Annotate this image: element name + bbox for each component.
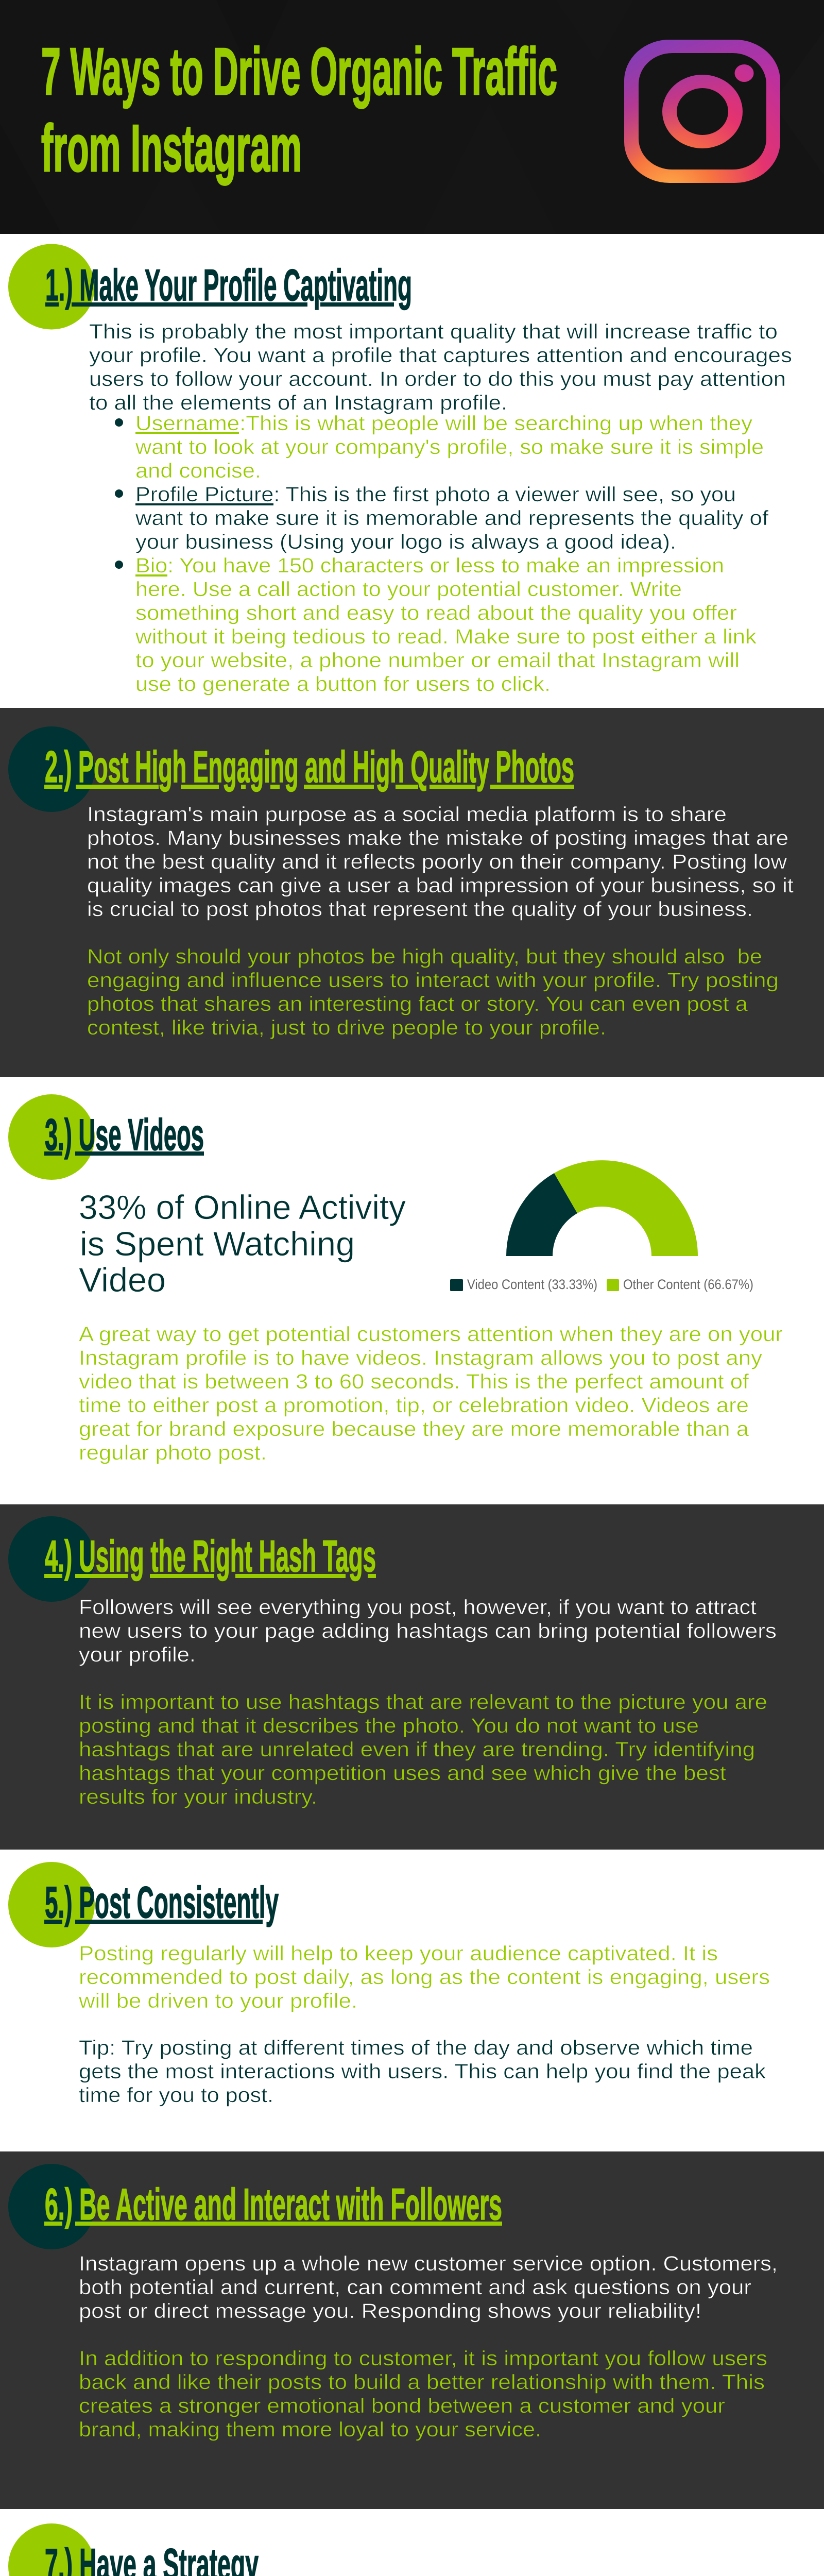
badge circle 1 (8, 244, 95, 330)
green paragraph: regular photo post. (79, 1442, 267, 1464)
bullet: profile picture: want to make sure it is memorable and represents the quality of (135, 507, 769, 530)
chart legend: Video Content (33.33%) (467, 1277, 597, 1292)
white paragraph: Instagram's main purpose as a social media platform is to share (87, 803, 727, 826)
badge circle 4 (8, 1516, 95, 1602)
tip paragraph (79, 2037, 766, 2107)
white paragraph (87, 803, 794, 921)
green paragraph (79, 1691, 767, 1808)
green paragraph: creates a stronger emotional bond between a customer and your (79, 2395, 725, 2417)
chart legend: Other Content (66.67%) (623, 1277, 753, 1292)
stat text (79, 1188, 406, 1299)
bullet: username: want to look at your company's profile, so make sure it is simple (135, 436, 764, 459)
bullet: bio: Bio: You have 150 characters or less to make an impression (135, 554, 724, 577)
bullet: username: and concise. (135, 460, 261, 482)
green paragraph: recommended to post daily, as long as the content is engaging, users (79, 1966, 770, 1989)
green paragraph: hashtags that your competition uses and see which give the best (79, 1762, 726, 1785)
heading 3: 3.) Use Videos (45, 1110, 204, 1160)
badge circle 2 (8, 726, 95, 812)
green paragraph: engaging and influence users to interact with your profile. Try posting (87, 969, 779, 992)
heading 4 (44, 1532, 376, 1581)
panel: section 5 post consistently (0, 1850, 824, 2151)
green paragraph: Not only should your photos be high quality, but they should also be (87, 945, 762, 968)
bullet: bio: here. Use a call action to your potential customer. Write (135, 578, 682, 601)
white paragraph: photos. Many businesses make the mistake of posting images that are (87, 827, 788, 850)
panel: section 6 be active (0, 2151, 824, 2509)
white paragraph (79, 2252, 778, 2323)
green paragraph: hashtags that are unrelated even if they are trending. Try identifying (79, 1738, 755, 1761)
badge circle 7 (8, 2523, 95, 2576)
heading 4: 4.) Using the Right Hash Tags (45, 1532, 376, 1581)
bullet: bio: to your website, a phone number or email that Instagram will (135, 649, 740, 672)
intro paragraph: to all the elements of an Instagram profile. (89, 392, 507, 414)
heading 2 (44, 742, 574, 792)
bullet: profile picture: Profile Picture: This is the first photo a viewer will see, so you (135, 483, 736, 506)
intro paragraph: users to follow your account. In order to do this you must pay attention (89, 368, 786, 391)
badge circle 5 (8, 1862, 95, 1947)
intro paragraph: your profile. You want a profile that captures attention and encourages (89, 344, 792, 367)
bullet: username (115, 412, 764, 482)
badge circle 6 (8, 2164, 95, 2249)
badge circle 3 (8, 1094, 95, 1180)
white paragraph: new users to your page adding hashtags can bring potential followers (79, 1620, 777, 1642)
green paragraph: Instagram profile is to have videos. Instagram allows you to post any (79, 1347, 762, 1369)
tip paragraph: Tip: Try posting at different times of the day and observe which time (79, 2037, 753, 2059)
green paragraph: time to either post a promotion, tip, or celebration video. Videos are (79, 1394, 749, 1417)
green paragraph: A great way to get potential customers attention when they are on your (79, 1323, 783, 1346)
heading 6 (44, 2180, 502, 2229)
green paragraph: In addition to responding to customer, it is important you follow users (79, 2347, 767, 2370)
heading 1: 1.) Make Your Profile Captivating (45, 261, 412, 310)
white paragraph: both potential and current, can comment and ask questions on your (79, 2276, 751, 2299)
green paragraph: great for brand exposure because they are more memorable than a (79, 1418, 749, 1440)
panel: section 7 have a strategy (0, 2509, 824, 2576)
tip paragraph: gets the most interactions with users. This can help you find the peak (79, 2060, 766, 2083)
stat text: is Spent Watching (80, 1225, 355, 1263)
green paragraph: will be driven to your profile. (78, 1990, 357, 2012)
panel: section 1 make your profile captivating (0, 234, 824, 708)
bullet: bio: without it being tedious to read. Make sure to post either a link (135, 625, 757, 648)
green paragraph: posting and that it describes the photo. You do not want to use (79, 1715, 699, 1737)
white paragraph: quality images can give a user a bad impression of your business, so it (87, 874, 794, 897)
green paragraph: It is important to use hashtags that are relevant to the picture you are (79, 1691, 767, 1714)
green paragraph: photos that shares an interesting fact or story. You can even post a (87, 993, 748, 1015)
bullet: profile picture (115, 483, 769, 553)
heading 5 (44, 1878, 279, 1927)
stat text: 33% of Online Activity (79, 1188, 406, 1226)
green paragraph (87, 945, 779, 1039)
white paragraph: is crucial to post photos that represent the quality of your business. (87, 898, 753, 921)
title (41, 35, 557, 185)
green paragraph: brand, making them more loyal to your service. (79, 2418, 541, 2441)
panel: header (0, 0, 824, 234)
chart legend (450, 1277, 753, 1292)
intro paragraph (89, 320, 792, 414)
panel: section 4 hash tags (0, 1504, 824, 1850)
green paragraph: results for your industry. (79, 1786, 317, 1808)
white paragraph: Instagram opens up a whole new customer service option. Customers, (79, 2252, 778, 2275)
heading 5: 5.) Post Consistently (45, 1878, 279, 1927)
green paragraph (78, 1942, 770, 2012)
green paragraph: back and like their posts to build a better relationship with them. This (79, 2371, 765, 2394)
bullet: username: Username:This is what people will be searching up when they (135, 412, 752, 435)
stat text: Video (79, 1261, 166, 1299)
intro paragraph: This is probably the most important quality that will increase traffic to (89, 320, 778, 343)
green paragraph: Posting regularly will help to keep your audience captivated. It is (79, 1942, 718, 1965)
bullet: bio: use to generate a button for users to click. (135, 673, 551, 696)
white paragraph: your profile. (79, 1643, 196, 1666)
white paragraph: not the best quality and it reflects poorly on their company. Posting low (87, 851, 787, 873)
green paragraph (79, 1323, 783, 1464)
green paragraph: video that is between 3 to 60 seconds. This is the perfect amount of (79, 1370, 749, 1393)
green paragraph (79, 2347, 767, 2441)
gauge chart (506, 1160, 698, 1256)
bullet: bio (115, 554, 757, 696)
title: from Instagram (41, 111, 302, 185)
heading 1 (45, 261, 412, 310)
bullet: profile picture: your business (Using your logo is always a good idea). (135, 531, 676, 553)
green paragraph: contest, like trivia, just to drive people to your profile. (87, 1016, 606, 1039)
icon: instagram logo (624, 40, 780, 183)
white paragraph: Followers will see everything you post, however, if you want to attract (79, 1596, 757, 1619)
panel: section 3 use videos (0, 1077, 824, 1504)
white paragraph: post or direct message you. Responding shows your reliability! (79, 2300, 701, 2323)
heading 3 (44, 1110, 204, 1160)
panel: section 2 post high engaging photos (0, 708, 824, 1077)
tip paragraph: time for you to post. (79, 2084, 273, 2107)
white paragraph (79, 1596, 777, 1666)
bullet: bio: something short and easy to read about the quality you offer (135, 602, 737, 624)
